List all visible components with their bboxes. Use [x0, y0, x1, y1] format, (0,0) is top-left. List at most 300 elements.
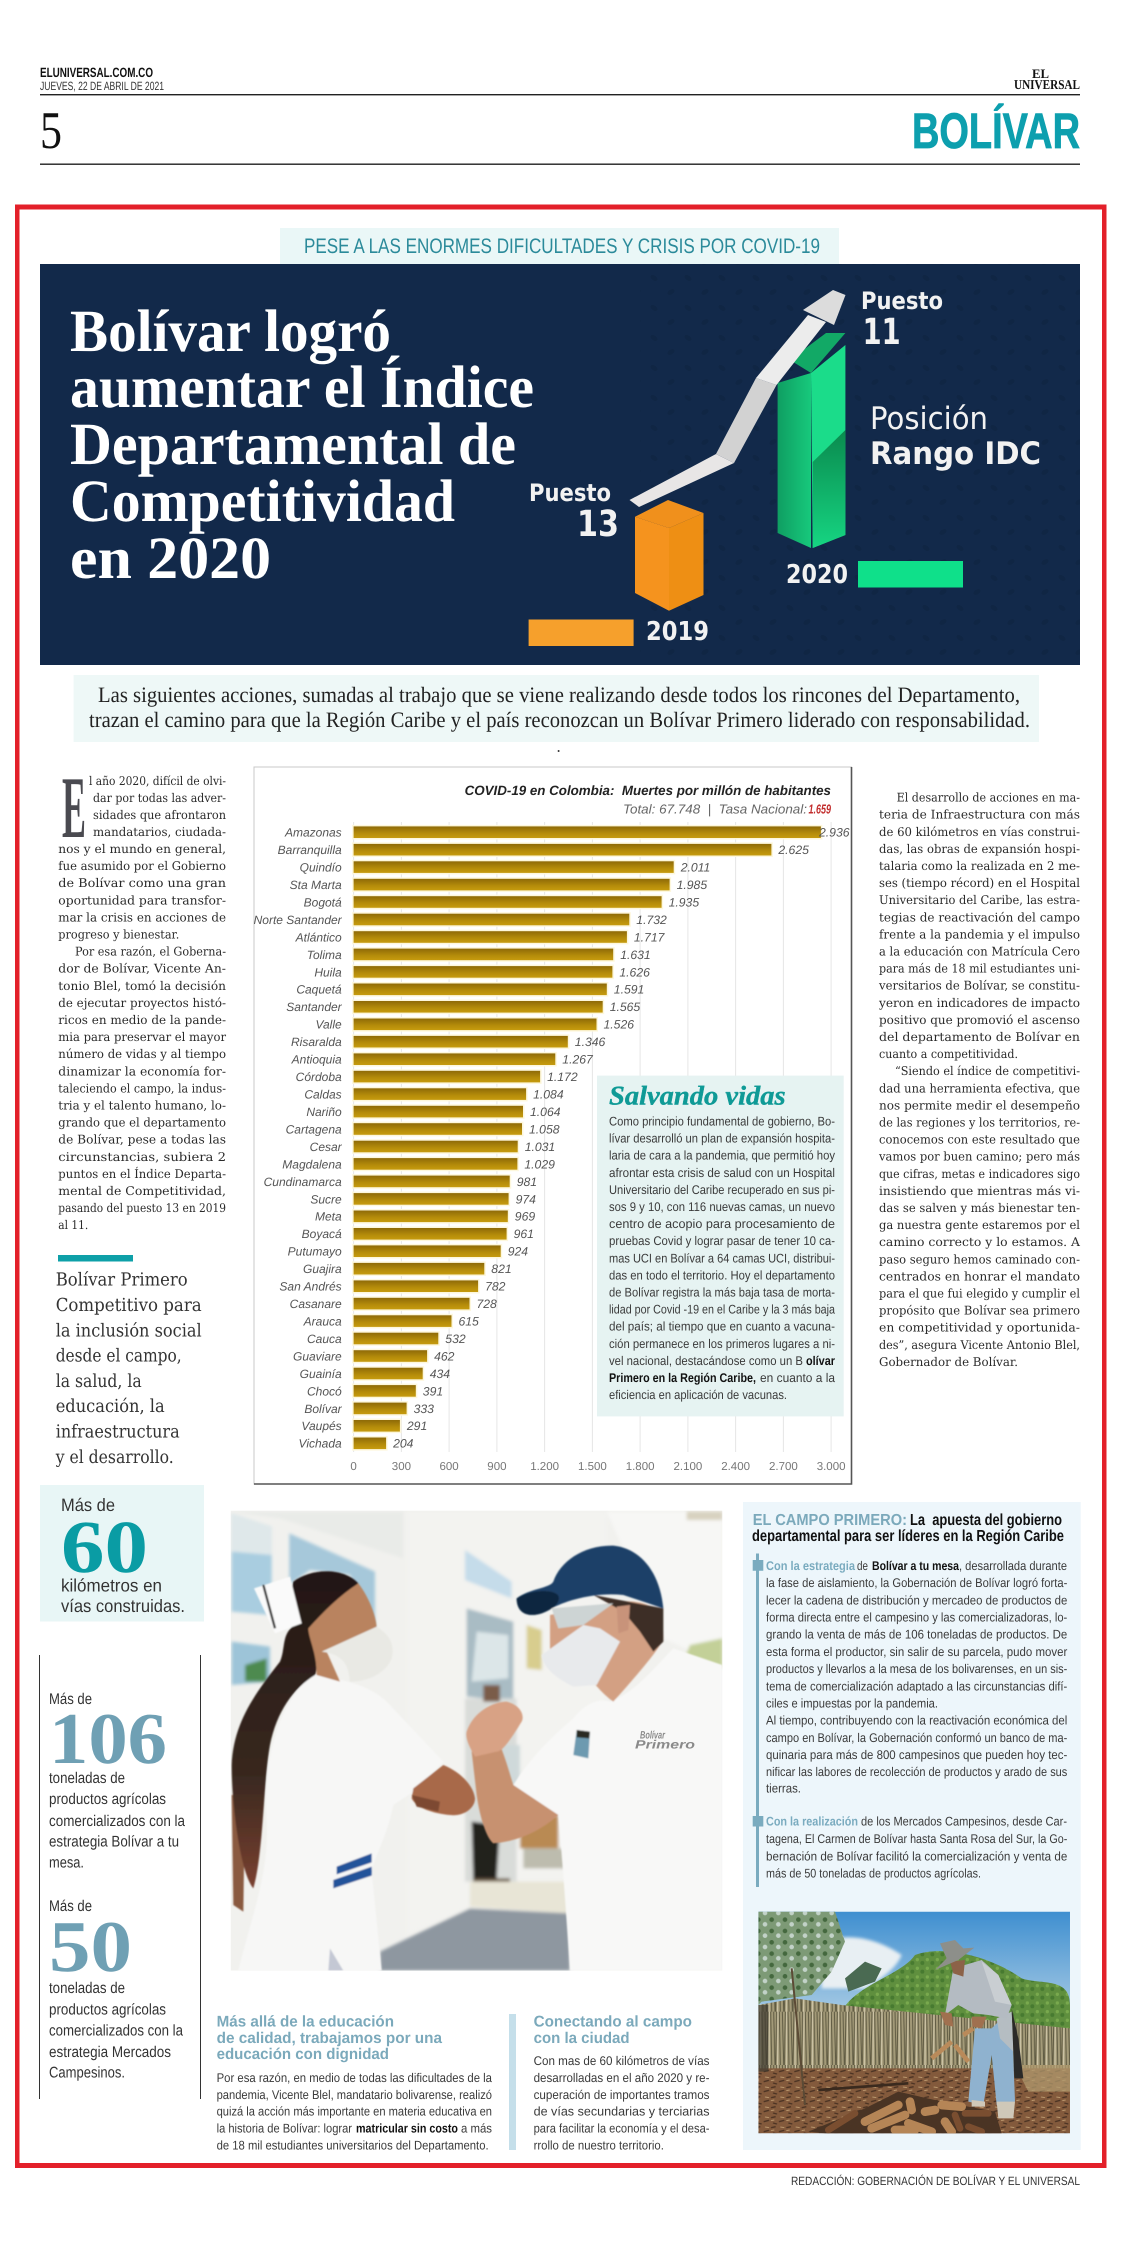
- heading: de calidad, trabajamos por una: [217, 2030, 442, 2047]
- panel body: Con la realización: [766, 1815, 858, 1829]
- category labels: San Andrés: [279, 1280, 342, 1294]
- panel: Salvando vidas: pruebas Covid y lograr pasar de tener 10 ca-: [609, 1234, 835, 1248]
- value labels: 1.631: [620, 948, 651, 962]
- chart title: COVID-19 en Colombia: Muertes por millón de habitantes: [465, 783, 831, 798]
- stat: 106: productos agrícolas: [49, 1791, 166, 1808]
- right column article: das, las obras de expansión hospi-: [879, 842, 1080, 856]
- article: educación: [217, 2014, 492, 2152]
- heading: [534, 2014, 692, 2047]
- man: [466, 1546, 722, 1971]
- category labels: Guainía: [300, 1367, 342, 1381]
- category labels: Santander: [286, 1000, 343, 1014]
- left column article: nos y el mundo en general,: [58, 842, 226, 856]
- right column article: de 60 kilómetros en vías construi-: [879, 825, 1080, 839]
- body: Con mas de 60 kilómetros de vías: [534, 2054, 710, 2068]
- value labels: 2.011: [680, 860, 710, 874]
- value labels: 1.591: [614, 983, 644, 997]
- x axis labels: [350, 1461, 845, 1473]
- label: Puesto 11: 11: [863, 312, 901, 353]
- pull quote: [55, 1255, 202, 1468]
- value labels: 728: [476, 1297, 497, 1311]
- value labels: 1.935: [669, 895, 699, 909]
- category labels: Norte Santander: [254, 913, 343, 927]
- value labels: 333: [414, 1402, 434, 1416]
- kicker tag: [280, 228, 839, 264]
- panel: Salvando vidas: [597, 1076, 844, 1416]
- x axis labels: 1.200: [530, 1461, 559, 1473]
- category labels: Tolima: [307, 948, 342, 962]
- category labels: Vichada: [299, 1437, 342, 1451]
- x axis labels: 3.000: [817, 1461, 845, 1473]
- stat: 106: mesa.: [49, 1855, 84, 1872]
- panel: Salvando vidas: vel nacional, destacándose como un B: [609, 1354, 803, 1368]
- body: a más: [461, 2122, 492, 2136]
- right column article: frente a la pandemia y el impulso: [879, 927, 1080, 941]
- body: matricular sin costo: [356, 2122, 458, 2136]
- right column article: propósito que Bolívar sea primero: [879, 1304, 1080, 1318]
- category labels: Guajira: [303, 1262, 342, 1276]
- value labels: 821: [491, 1262, 512, 1276]
- value labels: 1.029: [524, 1157, 555, 1171]
- stat: 50: estrategia Mercados: [49, 2044, 171, 2061]
- photo: elbow greeting: [231, 1511, 722, 1971]
- label: Posición Rango IDC: Rango IDC: [870, 436, 1041, 472]
- right column article: “Siendo el índice de competitivi-: [895, 1064, 1080, 1078]
- panel: Salvando vidas: mas UCI en Bolívar a 64 camas UCI, distribui-: [609, 1251, 835, 1265]
- right column article: Universitario del Caribe, las estra-: [879, 893, 1080, 907]
- panel: Salvando vidas: en cuanto a la: [760, 1371, 835, 1385]
- right column article: Gobernador de Bolívar.: [879, 1355, 1018, 1369]
- left column article: Por esa razón, el Goberna-: [75, 945, 226, 959]
- panel: Salvando vidas: Primero en la Región Caribe,: [609, 1371, 756, 1385]
- category labels: Valle: [315, 1018, 342, 1032]
- panel: Salvando vidas: ción permanece en los primeros lugares a ni-: [609, 1337, 835, 1351]
- left column article: mental de Competitividad,: [58, 1184, 226, 1198]
- value labels: 532: [445, 1332, 466, 1346]
- stats: toneladas: [39, 1655, 201, 2099]
- title: [70, 298, 534, 591]
- body: [534, 2054, 710, 2152]
- panel body: quinaria para más de 800 campesinos que pueden hoy tec-: [766, 1748, 1067, 1762]
- category labels: Amazonas: [284, 826, 342, 840]
- value labels: 434: [430, 1367, 450, 1381]
- category labels: Córdoba: [296, 1070, 342, 1084]
- cassava pile: [808, 2092, 1002, 2133]
- x axis labels: 1.800: [626, 1461, 654, 1473]
- x axis labels: 2.400: [721, 1461, 750, 1473]
- stat: 60 km: 60: [61, 1506, 148, 1589]
- right column article: ses (tiempo récord) en el Hospital: [879, 876, 1080, 890]
- pull quote: educación, la: [56, 1396, 165, 1417]
- x axis labels: 2.700: [769, 1461, 798, 1473]
- masthead: [40, 65, 1080, 165]
- value labels: 1.031: [525, 1140, 555, 1154]
- panel: Salvando vidas: Universitario del Caribe recuperado en sus pi-: [609, 1183, 835, 1197]
- panel body: más de 50 toneladas de productos agrícolas.: [766, 1866, 981, 1880]
- panel: El campo primero: [743, 1502, 1081, 2150]
- logo: El Universal: UNIVERSAL: [1014, 77, 1080, 92]
- left column article: de Bolívar, pese a todas las: [58, 1133, 226, 1147]
- left column article: de ejecutar proyectos histó-: [58, 996, 226, 1010]
- chart subtitle: 1.659: [808, 802, 832, 816]
- body: desarrolladas en el año 2020 y re-: [534, 2071, 710, 2085]
- stat: 106: [49, 1691, 185, 1872]
- value labels: 1.267: [562, 1053, 594, 1067]
- value labels: 462: [434, 1349, 455, 1363]
- pull quote: infraestructura: [56, 1422, 180, 1442]
- category labels: Cesar: [310, 1140, 343, 1154]
- body: quizá la acción más importante en materia educativa en: [217, 2104, 492, 2118]
- left column article: puntos en el Índice Departa-: [58, 1166, 226, 1181]
- bar chart: [254, 767, 852, 1484]
- label: Posición Rango IDC: Posición: [870, 401, 988, 437]
- right column article: vamos por buen camino; pero más: [878, 1150, 1080, 1164]
- category labels: Bolívar: [304, 1402, 343, 1416]
- right column article: versitarios de Bolívar, se constitu-: [878, 979, 1080, 993]
- left column article: progreso y bienestar.: [58, 928, 179, 942]
- value labels: 1.084: [533, 1088, 564, 1102]
- pull quote: la salud, la: [56, 1371, 142, 1392]
- category labels: Chocó: [307, 1384, 342, 1398]
- panel body: Con la estrategia: [766, 1559, 856, 1573]
- nurse: [232, 1571, 475, 1971]
- stat: 50: comercializados con la: [49, 2023, 183, 2040]
- value labels: 1.526: [604, 1018, 634, 1032]
- right column article: conocemos con este resultado que: [879, 1133, 1080, 1147]
- category labels: Magdalena: [282, 1157, 342, 1171]
- label: Puesto 13: 13: [577, 504, 619, 545]
- category labels: Huila: [314, 965, 342, 979]
- icon: green column 2020: [778, 333, 845, 548]
- x axis labels: 300: [392, 1461, 411, 1473]
- panel body: forma directa entre el campesino y las comercializadoras, lo-: [766, 1610, 1067, 1624]
- panel body: Bolívar a tu mesa: [872, 1559, 960, 1573]
- value labels: 961: [514, 1227, 534, 1241]
- panel body: grando la venta de más de 106 toneladas de productos. De: [766, 1628, 1067, 1642]
- left column article: E: [62, 760, 86, 857]
- category labels: Meta: [315, 1210, 342, 1224]
- right column article: que cifras, metas e indicadores sigo: [879, 1167, 1080, 1181]
- stat: 106: comercializados con la: [49, 1813, 185, 1830]
- panel: Salvando vidas: centro de acopio para procesamiento de: [609, 1217, 835, 1231]
- category labels: Boyacá: [302, 1227, 342, 1241]
- stat: 60 km: [40, 1485, 204, 1622]
- label: Puesto 11: [861, 287, 943, 353]
- label: Puesto 13: Puesto: [529, 479, 611, 507]
- stat: 50: [49, 1898, 183, 2081]
- category labels: Risaralda: [291, 1035, 342, 1049]
- stat: 106: toneladas de: [49, 1770, 125, 1787]
- banner: [40, 264, 1080, 665]
- panel body: esta forma el productor, sin salir de su parcela, pudo mover: [766, 1645, 1067, 1659]
- stat: 60 km: Más de: [61, 1495, 115, 1515]
- x axis labels: 2.100: [674, 1461, 702, 1473]
- stat: 50: Campesinos.: [49, 2064, 125, 2081]
- left column article: ricos en medio de la pande-: [58, 1013, 226, 1027]
- stat: 60 km: kilómetros en: [61, 1576, 162, 1596]
- left column article: número de vidas y al tiempo: [58, 1047, 226, 1061]
- panel: Salvando vidas: eficiencia en aplicación de vacunas.: [609, 1388, 787, 1402]
- title: Departamental de: [70, 411, 516, 477]
- left column article: grando que el departamento: [58, 1116, 226, 1130]
- x axis labels: 900: [487, 1461, 506, 1473]
- value labels: 1.626: [619, 965, 650, 979]
- pull quote: la inclusión social: [56, 1320, 202, 1341]
- left column article: al 11.: [58, 1218, 88, 1232]
- value labels: 2.936: [818, 826, 850, 840]
- right column article: camino correcto y lo estamos. A: [879, 1235, 1080, 1249]
- left column article: dinamizar la economía for-: [58, 1064, 226, 1078]
- right column article: cuanto a competitividad.: [879, 1047, 1018, 1061]
- left column article: dar por todas las adver-: [93, 791, 226, 805]
- value labels: 1.565: [610, 1000, 640, 1014]
- x axis labels: 600: [440, 1461, 459, 1473]
- value labels: 1.058: [529, 1122, 560, 1136]
- title: en 2020: [70, 525, 271, 591]
- category labels: Caldas: [304, 1088, 342, 1102]
- title: Competitividad: [70, 468, 455, 534]
- value labels: 1.717: [634, 930, 666, 944]
- legend: 2020: [786, 560, 963, 590]
- category labels: Vaupés: [301, 1419, 342, 1433]
- category labels: Sucre: [310, 1192, 342, 1206]
- panel heading: La apuesta del gobierno: [910, 1512, 1062, 1529]
- body: de vías secundarias y terciarias: [534, 2104, 710, 2118]
- panel body: ciles e impuestas por la pandemia.: [766, 1696, 938, 1710]
- label: Puesto 13: [529, 479, 619, 545]
- legend: 2019: [529, 617, 709, 647]
- date: JUEVES, 22 DE ABRIL DE 2021: [40, 79, 164, 93]
- panel body: campo en Bolívar, la Gobernación conformó un banco de ma-: [766, 1731, 1067, 1745]
- category labels: Casanare: [290, 1297, 342, 1311]
- legend: 2019: 2019: [646, 617, 709, 647]
- logo: El Universal: EL: [1032, 66, 1049, 81]
- panel body: la fase de aislamiento, la Gobernación de Bolívar logró forta-: [766, 1576, 1067, 1590]
- stat: 60 km: vías construidas.: [61, 1596, 185, 1616]
- right column article: de las regiones y los territorios, re-: [879, 1116, 1080, 1130]
- right column article: [878, 791, 1080, 1369]
- left column article: mandatarios, ciudada-: [93, 825, 226, 839]
- pull quote: desde el campo,: [56, 1346, 182, 1367]
- page number: 5: [40, 102, 62, 160]
- panel body: de: [857, 1559, 868, 1573]
- heading: [217, 2014, 442, 2063]
- right column article: El desarrollo de acciones en ma-: [897, 791, 1080, 805]
- value labels: 1.172: [547, 1070, 578, 1084]
- panel body: [766, 1559, 1067, 1880]
- kicker tag: PESE A LAS ENORMES DIFICULTADES Y CRISIS POR COVID-19: [304, 235, 820, 258]
- panel body: bernación de Bolívar facilitó la comercialización y venta de: [766, 1849, 1067, 1863]
- panel: Salvando vidas: lívar desarrolló un plan de expansión hospita-: [609, 1132, 835, 1146]
- stat: 106: Más de: [49, 1691, 92, 1708]
- photo: elbow greeting: Bolívar: [640, 1729, 665, 1741]
- label: Posición Rango IDC: [870, 401, 1041, 472]
- panel: Salvando vidas: Como principio fundamental de gobierno, Bo-: [609, 1114, 835, 1128]
- panel: Salvando vidas: de Bolívar registra la más baja tasa de morta-: [609, 1286, 835, 1300]
- body: rrollo de nuestro territorio.: [534, 2138, 664, 2152]
- right column article: positivo que promovió el ascenso: [879, 1013, 1080, 1027]
- bars: [354, 826, 821, 1449]
- pull quote: Bolívar Primero: [56, 1270, 188, 1291]
- body: para facilitar la economía y el desa-: [534, 2122, 710, 2136]
- photo: elbow greeting: Primero: [635, 1737, 695, 1751]
- left column article: tria y el talento humano, lo-: [58, 1098, 226, 1112]
- body: la historia de Bolívar: lograr: [217, 2122, 352, 2136]
- stat: 50: toneladas de: [49, 1980, 125, 1997]
- value labels: 981: [517, 1175, 537, 1189]
- heading: educación con dignidad: [217, 2046, 389, 2063]
- panel: Salvando vidas: afrontar esta crisis de salud con un Hospital: [609, 1166, 835, 1180]
- value labels: 204: [392, 1437, 414, 1451]
- left column article: circunstancias, subiera 2: [58, 1150, 226, 1164]
- category labels: Antioquia: [291, 1053, 342, 1067]
- right column article: insistiendo que mientras más vi-: [879, 1184, 1080, 1198]
- left column article: tonio Blel, tomó la decisión: [58, 979, 226, 993]
- panel: Salvando vidas: del país; al tiempo que en cuanto a vacuna-: [609, 1320, 835, 1334]
- left column article: fue asumido por el Gobierno: [58, 859, 226, 873]
- body: pandemia, Vicente Blel, mandatario bolivarense, realizó: [217, 2088, 492, 2102]
- left column article: mia para preservar el mayor: [58, 1030, 226, 1044]
- value labels: 291: [406, 1419, 427, 1433]
- stat: 50: 50: [49, 1906, 132, 1987]
- body: de 18 mil estudiantes universitarios del Departamento.: [217, 2138, 489, 2152]
- right column article: para más de 18 mil estudiantes uni-: [879, 962, 1080, 976]
- category labels: Nariño: [306, 1105, 342, 1119]
- panel: Salvando vidas: olívar: [806, 1354, 835, 1368]
- category labels: Cartagena: [286, 1122, 342, 1136]
- left column article: pasando del puesto 13 en 2019: [58, 1201, 226, 1215]
- left column article: taleciendo el campo, la indus-: [58, 1081, 226, 1095]
- value labels: 1.064: [530, 1105, 561, 1119]
- panel: Salvando vidas: laria de cara a la pandemia, que permitió hoy: [609, 1149, 836, 1163]
- value labels: [392, 826, 850, 1451]
- value labels: 974: [516, 1192, 536, 1206]
- panel body: tema de comercialización adaptado a las circunstancias difí-: [766, 1679, 1067, 1693]
- category labels: Guaviare: [293, 1349, 342, 1363]
- category labels: [254, 826, 343, 1451]
- value labels: 782: [485, 1280, 506, 1294]
- panel: Salvando vidas: das en todo el territorio. Hoy el departamento: [609, 1268, 835, 1282]
- x axis labels: 1.500: [578, 1461, 607, 1473]
- right column article: tegias de reactivación del campo: [879, 910, 1080, 924]
- category labels: Quindío: [300, 860, 342, 874]
- right column article: talaria como la realizada en 2 me-: [879, 859, 1080, 873]
- article: conectando: [534, 2014, 710, 2152]
- heading: Más allá de la educación: [217, 2014, 394, 2030]
- stat: 106: 106: [49, 1698, 167, 1779]
- logo: El Universal: [1014, 66, 1080, 92]
- pull quote: Competitivo para: [56, 1295, 202, 1316]
- farmer: [932, 1940, 1023, 2118]
- category labels: Putumayo: [288, 1245, 342, 1259]
- photo: farmer with cassava: [758, 1912, 1070, 2133]
- right column article: ga nuestra gente estaremos por el: [879, 1218, 1080, 1232]
- right column article: teria de Infraestructura con más: [879, 808, 1080, 822]
- category labels: Bogotá: [304, 895, 342, 909]
- value labels: 615: [458, 1314, 479, 1328]
- arrow: [630, 290, 846, 507]
- x axis labels: 0: [350, 1461, 357, 1473]
- site name: ELUNIVERSAL.COM.CO: [40, 65, 153, 80]
- panel heading: EL CAMPO PRIMERO:: [753, 1512, 907, 1529]
- value labels: 391: [423, 1384, 443, 1398]
- title: aumentar el Índice: [70, 354, 534, 420]
- value labels: 1.985: [677, 878, 707, 892]
- left column article: l año 2020, difícil de olvi-: [89, 774, 226, 788]
- panel body: productos y llevarlos a la mesa de los bolivarenses, en un sis-: [766, 1662, 1067, 1676]
- value labels: 2.625: [777, 843, 809, 857]
- chart subtitle: Total: 67.748 | Tasa Nacional:: [623, 802, 807, 816]
- panel body: Al tiempo, contribuyendo con la reactivación económica del: [766, 1714, 1067, 1728]
- panel heading: [752, 1512, 1064, 1545]
- category labels: Atlántico: [295, 930, 342, 944]
- pull quote: y el desarrollo.: [55, 1447, 174, 1468]
- category labels: Cundinamarca: [264, 1175, 342, 1189]
- heading: con la ciudad: [534, 2030, 630, 2047]
- heading: Conectando al campo: [534, 2014, 692, 2030]
- panel body: tierras.: [766, 1781, 801, 1795]
- panel body: nificar las labores de recolección de productos y arado de sus: [766, 1765, 1067, 1779]
- right column article: das se salven y más bienestar ten-: [879, 1201, 1080, 1215]
- value labels: 1.346: [575, 1035, 606, 1049]
- left column article: de Bolívar como una gran: [58, 876, 226, 890]
- body: [217, 2071, 492, 2152]
- panel body: de los Mercados Campesinos, desde Car-: [861, 1815, 1067, 1829]
- right column article: a la educación con Matrícula Cero: [879, 944, 1080, 958]
- value labels: 924: [508, 1245, 528, 1259]
- value labels: 1.732: [636, 913, 667, 927]
- right column article: des”, asegura Vicente Antonio Blel,: [879, 1338, 1080, 1352]
- label: Puesto 11: Puesto: [861, 287, 943, 315]
- panel body: lecer la cadena de distribución y mercadeo de productos de: [766, 1593, 1067, 1607]
- icon: orange column 2019: [635, 500, 704, 611]
- panel: Salvando vidas: sos 9 y 10, con 116 nuevas camas, un nuevo: [609, 1200, 835, 1214]
- panel body: tagena, El Carmen de Bolívar hasta Santa Rosa del Sur, la Go-: [766, 1832, 1067, 1846]
- panel: Salvando vidas: lidad por Covid -19 en el Caribe y la 3 más baja: [609, 1303, 835, 1317]
- right column article: paso seguro hemos caminado con-: [879, 1252, 1080, 1266]
- stat: 50: Más de: [49, 1898, 92, 1915]
- right column article: dad una herramienta efectiva, que: [879, 1081, 1080, 1095]
- left column article: dor de Bolívar, Vicente An-: [58, 962, 226, 976]
- legend: 2020: 2020: [786, 560, 848, 590]
- right column article: para el que fui elegido y cumplir el: [879, 1286, 1080, 1300]
- right column article: del departamento de Bolívar en: [879, 1030, 1080, 1044]
- value labels: 969: [515, 1210, 535, 1224]
- category labels: Cauca: [307, 1332, 342, 1346]
- intro text: Las siguientes acciones, sumadas al trabajo que se viene realizando desde todos los rincones del Departamento,: [98, 682, 1020, 707]
- left column article: [58, 760, 226, 1232]
- category labels: Caquetá: [296, 983, 342, 997]
- right column article: en competitividad y oportunida-: [879, 1321, 1080, 1335]
- intro text: trazan el camino para que la Región Caribe y el país reconozcan un Bolívar Primero liderado con responsabilidad.: [89, 707, 1030, 732]
- intro text: [74, 675, 1039, 742]
- left column article: mar la crisis en acciones de: [58, 910, 226, 924]
- stat: 50: productos agrícolas: [49, 2002, 166, 2018]
- right column article: nos permite medir el desempeño: [879, 1098, 1080, 1112]
- left column article: sidades que afrontaron: [93, 808, 226, 822]
- body: Por esa razón, en medio de todas las dificultades de la: [217, 2071, 492, 2085]
- body: cuperación de importantes tramos: [534, 2088, 710, 2102]
- category labels: Arauca: [303, 1314, 342, 1328]
- stat: 106: estrategia Bolívar a tu: [49, 1834, 179, 1850]
- category labels: Sta Marta: [290, 878, 342, 892]
- category labels: Barranquilla: [278, 843, 342, 857]
- panel heading: Salvando vidas: [609, 1080, 786, 1110]
- right column article: yeron en indicadores de impacto: [878, 996, 1080, 1010]
- panel body: , desarrollada durante: [959, 1559, 1067, 1573]
- title: Bolívar logró: [70, 298, 391, 365]
- right column article: centrados en honrar el mandato: [879, 1269, 1080, 1283]
